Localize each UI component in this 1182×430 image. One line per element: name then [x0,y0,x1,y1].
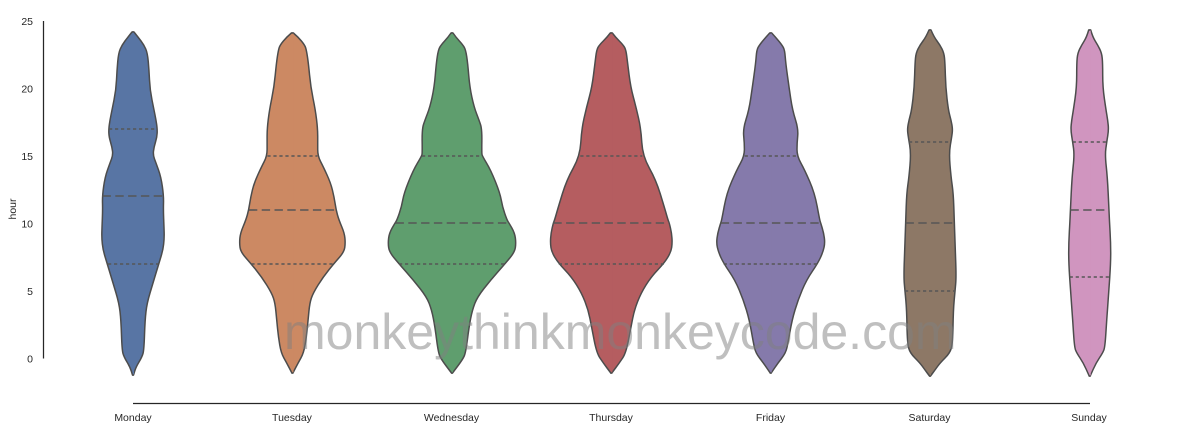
y axis: 10 [21,218,33,230]
y axis: 5 [27,286,33,298]
y axis [21,16,44,366]
violin: Tuesday [240,33,345,373]
violin: Wednesday [388,33,516,373]
watermark: monkeythinkmonkeycode.com [284,304,957,360]
violin: Monday [102,32,164,375]
x axis: Monday [114,412,152,424]
x axis: Wednesday [424,412,480,424]
x axis: Thursday [589,412,634,424]
x axis: Saturday [908,412,951,424]
y axis: 0 [27,354,33,366]
x axis [114,404,1108,424]
violin: Thursday [551,33,672,373]
violin: Sunday [1069,30,1111,376]
x axis: Tuesday [272,412,313,424]
violin: Friday [717,33,825,373]
y axis: 25 [21,16,33,28]
y axis title: hour [7,198,19,220]
x axis: Sunday [1071,412,1108,424]
violin: Saturday [904,30,956,376]
y axis: 15 [21,151,33,163]
x axis: Friday [756,412,786,424]
y axis: 20 [21,84,33,96]
